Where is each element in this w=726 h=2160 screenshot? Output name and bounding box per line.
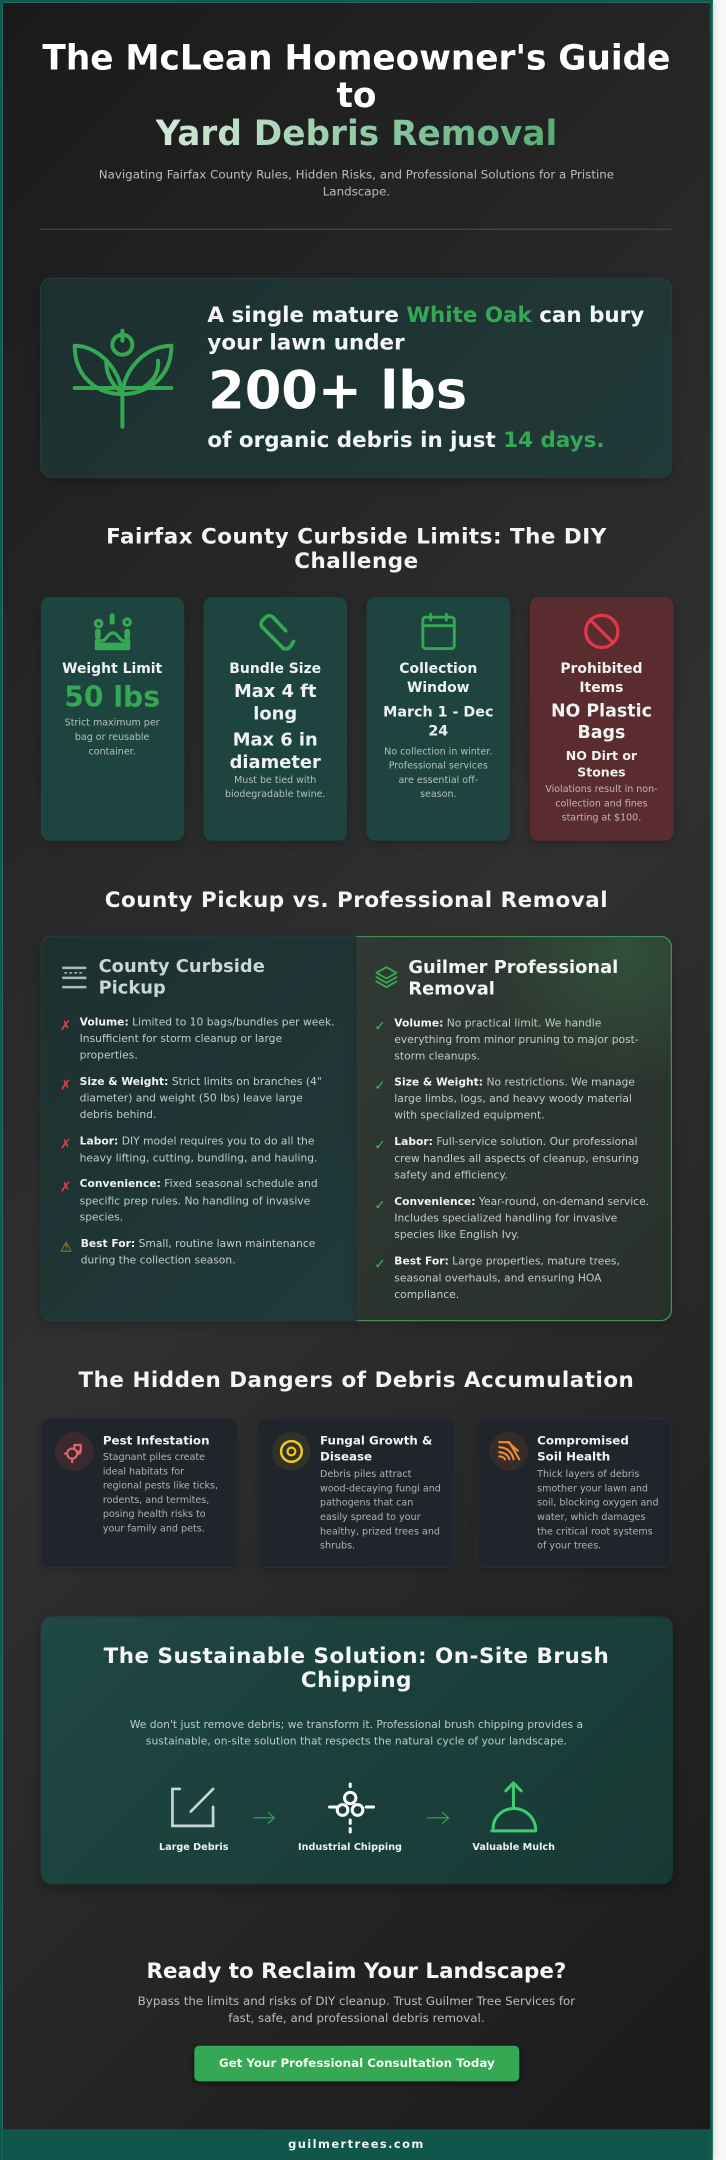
note: Strict maximum per: [65, 718, 160, 729]
card text: healthy, prized trees and: [320, 1526, 440, 1537]
card text: of your trees.: [537, 1540, 601, 1551]
card title: Bundle Size: [229, 660, 321, 676]
row: volume: ✓: [374, 1018, 386, 1034]
footer: [0, 2129, 713, 2160]
card text: your family and pets.: [103, 1524, 205, 1534]
note: Violations result in non-: [545, 784, 658, 795]
heading: curbside limits: Challenge: [294, 549, 419, 574]
panel: weight limit card: [40, 597, 184, 841]
panel: comparison right guilmer professional: with specialized equipment.: [394, 1109, 545, 1122]
icon: paperclip: [259, 614, 296, 651]
subtitle: Navigating Fairfax County Rules, Hidden Risks, and Professional Solutions for a Pristine: [99, 168, 614, 181]
panel: comparison left county curbside: diameter) and weight (50 lbs) leave large: [80, 1091, 303, 1104]
panel: sustainable solution: [40, 1616, 673, 1884]
card text: [320, 1469, 441, 1551]
panel: comparison right guilmer professional: storm cleanups.: [394, 1049, 480, 1062]
panel: comparison right guilmer professional: seasonal overhauls, and ensuring HOA: [394, 1271, 601, 1284]
row: labor: ✓: [374, 1137, 386, 1153]
value: NO Plastic: [551, 700, 652, 721]
row: size: ✗: [60, 1077, 71, 1093]
row: volume: ✗: [60, 1018, 71, 1033]
row: labor: [374, 1135, 639, 1181]
secondary value: NO Dirt or: [566, 749, 637, 764]
row: labor: Labor: DIY model requires you to do all the: [80, 1134, 314, 1147]
card title: Pest Infestation: [103, 1434, 210, 1447]
note: No collection in winter.: [384, 746, 492, 757]
note: [545, 784, 658, 824]
row: volume: [60, 1015, 335, 1062]
flow label: Valuable Mulch: [472, 1841, 555, 1852]
title: The McLean Homeowner's Guide: [42, 38, 670, 78]
value: March 1 - Dec: [383, 702, 493, 720]
title: to: [336, 76, 376, 116]
note: container.: [89, 746, 136, 757]
card text: Debris piles attract: [320, 1469, 411, 1480]
panel: pest infestation: [41, 1418, 238, 1568]
values: Max 4 ft: [234, 680, 316, 701]
card text: easily spread to your: [320, 1512, 421, 1522]
card text: Thick layers of debris: [537, 1469, 639, 1480]
row: best for: ✓: [374, 1257, 386, 1272]
card title: [320, 1434, 432, 1464]
button: consultation: Get Your Professional Consultation Today: [219, 2056, 495, 2070]
arrow: [252, 1810, 275, 1825]
row: best for: [60, 1237, 315, 1267]
card text: smother your lawn and: [537, 1483, 648, 1494]
row: labor: [60, 1134, 317, 1164]
card text: rodents, and termites,: [103, 1495, 209, 1506]
panel: comparison left county curbside: heavy lifting, cutting, bundling, and hauling.: [80, 1151, 317, 1164]
button: consultation: [194, 2046, 519, 2081]
heading: [104, 1644, 609, 1693]
title: [42, 38, 670, 154]
icon: fungal target: [272, 1432, 311, 1471]
heading: Chipping: [301, 1668, 412, 1693]
value: [383, 702, 493, 739]
note: biodegradable twine.: [225, 789, 325, 800]
card text: [537, 1469, 659, 1551]
hero follow-up line: of organic debris in just 14 days.: [207, 428, 605, 453]
value: 24: [428, 722, 448, 739]
card text: posing health risks to: [103, 1509, 206, 1520]
panel: comparison right guilmer professional: everything from minor pruning to major post-: [394, 1033, 639, 1046]
note: are essential off-: [398, 775, 478, 786]
heading: hidden dangers: The Hidden Dangers of Debris Accumulation: [79, 1368, 634, 1393]
arrow: [427, 1810, 449, 1825]
footer: guilmertrees.com: [288, 2137, 425, 2150]
row: volume: Volume: Limited to 10 bags/bundles per week.: [80, 1015, 335, 1028]
column heading: Removal: [408, 977, 495, 998]
icon: bars: [62, 966, 86, 988]
row: best for: Best For: Large properties, mature trees,: [394, 1254, 620, 1267]
note: [384, 746, 492, 800]
panel: hero stat: [40, 277, 672, 477]
hero statement line: your lawn under: [207, 330, 405, 355]
values: long Max 6 in: [233, 702, 318, 750]
column heading: [99, 955, 265, 997]
note: collection and fines: [555, 799, 648, 809]
heading: comparison: County Pickup vs. Professional Removal: [105, 888, 608, 913]
hero statement line: A single mature White Oak can bury: [207, 303, 644, 328]
card text: the critical root systems: [537, 1526, 653, 1537]
row: volume: Volume: No practical limit. We handle: [394, 1016, 601, 1029]
card title: Window: [407, 679, 470, 696]
card text: wood-decaying fungi and: [320, 1483, 441, 1494]
panel: comparison right guilmer professional: [356, 936, 672, 1321]
panel: comparison right guilmer professional: Includes specialized handling for invasive: [394, 1211, 617, 1224]
note: Professional services: [389, 761, 488, 771]
card text: pathogens that can: [320, 1497, 413, 1508]
card title: [537, 1434, 629, 1464]
row: convenience: Convenience: Fixed seasonal schedule and: [80, 1177, 318, 1190]
panel: comparison left county curbside: Insufficient for storm cleanup or large: [80, 1032, 282, 1045]
panel: comparison right guilmer professional: crew handles all aspects of cleanup, ensuring: [394, 1152, 639, 1165]
icon: layers: [376, 966, 398, 988]
call to action text: fast, safe, and professional debris removal.: [228, 2012, 485, 2025]
note: [225, 775, 325, 800]
column heading: [408, 956, 618, 998]
row: labor: Labor: Full-service solution. Our professional: [394, 1135, 638, 1148]
row: convenience: Convenience: Year-round, on-demand service.: [394, 1195, 649, 1208]
card title: Fungal Growth &: [320, 1434, 432, 1447]
card text: soil, blocking oxygen and: [537, 1497, 659, 1508]
heading: curbside limits: Fairfax County Curbside Limits: The DIY: [106, 524, 607, 549]
panel: collection window card: [366, 597, 510, 841]
values: diameter: [230, 751, 321, 772]
icon: pest: [55, 1432, 94, 1471]
row: size: Size & Weight: No restrictions. We manage: [394, 1075, 635, 1088]
description: We don't just remove debris; we transform it. Professional brush chipping provides a: [130, 1718, 583, 1731]
value: Bags: [577, 721, 625, 742]
value: 50 lbs: [64, 681, 160, 714]
row: labor: ✗: [60, 1137, 71, 1152]
hero statement line: [207, 303, 644, 355]
icon: soil layers: [489, 1432, 528, 1471]
icon: calendar: [421, 613, 456, 650]
panel: comparison left county curbside: [41, 936, 356, 1321]
row: best for: Best For: Small, routine lawn maintenance: [81, 1237, 315, 1250]
column heading: Pickup: [99, 977, 166, 997]
icon: prohibited: [584, 614, 620, 650]
description: [40, 1716, 672, 1750]
big number: 200+ lbs: [208, 360, 467, 421]
panel: fungal growth: [258, 1418, 455, 1568]
row: volume: [374, 1016, 639, 1062]
note: bag or reusable: [75, 732, 149, 743]
note: Must be tied with: [234, 775, 316, 785]
card text: Stagnant piles create: [103, 1452, 205, 1463]
panel: compromised soil: [475, 1418, 672, 1568]
row: best for: ⚠: [60, 1239, 72, 1255]
icon: sprouting oak leaves: [72, 328, 174, 429]
row: best for: [374, 1254, 620, 1301]
row: size: Size & Weight: Strict limits on branches (4": [80, 1075, 322, 1088]
values: [230, 680, 321, 772]
icon: valuable mulch: [487, 1778, 540, 1835]
heading: curbside limits: [106, 524, 607, 574]
card title: [399, 660, 477, 696]
card title: Collection: [399, 660, 477, 676]
call to action text: [0, 1993, 713, 2027]
column heading: County Curbside: [99, 955, 265, 976]
description: sustainable, on-site solution that respects the natural cycle of your landscape.: [146, 1734, 567, 1747]
card title: Items: [579, 679, 623, 696]
panel: prohibited items card: [530, 597, 673, 841]
subtitle: Landscape.: [323, 185, 390, 199]
note: starting at $100.: [562, 813, 641, 824]
panel: bundle size card: [203, 597, 347, 841]
row: size: ✓: [374, 1078, 386, 1093]
subtitle: [99, 168, 614, 199]
panel: comparison right guilmer professional: safety and efficiency.: [394, 1168, 508, 1181]
row: size: [60, 1075, 322, 1121]
row: convenience: ✗: [60, 1179, 71, 1195]
panel: comparison left county curbside: specific prep rules. No handling of invasive: [80, 1194, 310, 1207]
row: convenience: ✓: [374, 1197, 386, 1213]
card title: Compromised: [537, 1434, 629, 1447]
call to action text: Bypass the limits and risks of DIY cleanup. Trust Guilmer Tree Services for: [138, 1994, 575, 2008]
row: convenience: [374, 1195, 649, 1241]
card text: ideal habitats for: [103, 1467, 184, 1477]
card title: [560, 660, 643, 696]
secondary value: Stones: [577, 766, 626, 780]
icon: large debris: [167, 1783, 220, 1830]
panel: comparison right guilmer professional: compliance.: [394, 1288, 459, 1301]
card title: Disease: [320, 1450, 372, 1464]
note: [65, 718, 160, 757]
panel: comparison right guilmer professional: species like English Ivy.: [394, 1228, 519, 1241]
flow label: Large Debris: [159, 1841, 228, 1852]
flow label: Industrial Chipping: [298, 1841, 402, 1852]
icon: weight: [94, 613, 132, 650]
title: Yard Debris Removal: [156, 114, 557, 154]
card title: Prohibited: [560, 660, 643, 676]
panel: comparison left county curbside: debris behind.: [80, 1108, 156, 1121]
card title: Weight Limit: [62, 660, 162, 676]
note: season.: [420, 789, 456, 800]
card title: Soil Health: [537, 1450, 610, 1464]
card text: water, which damages: [537, 1512, 645, 1522]
icon: industrial chipping: [323, 1780, 380, 1837]
panel: comparison left county curbside: properties.: [80, 1049, 138, 1062]
column heading: Guilmer Professional: [408, 956, 618, 977]
card text: regional pests like ticks,: [103, 1481, 218, 1492]
panel: comparison left county curbside: during the collection season.: [81, 1254, 236, 1267]
panel: comparison left county curbside: species.: [80, 1211, 123, 1223]
heading: The Sustainable Solution: On-Site Brush: [104, 1644, 609, 1669]
card text: shrubs.: [320, 1540, 355, 1551]
value: [551, 700, 652, 742]
secondary value: [566, 749, 637, 780]
heading: call to action: Ready to Reclaim Your Landscape?: [146, 1959, 566, 1984]
panel: comparison right guilmer professional: large limbs, logs, and heavy woody material: [394, 1092, 632, 1105]
card text: [103, 1452, 218, 1534]
row: convenience: [60, 1177, 318, 1223]
row: size: [374, 1075, 635, 1122]
